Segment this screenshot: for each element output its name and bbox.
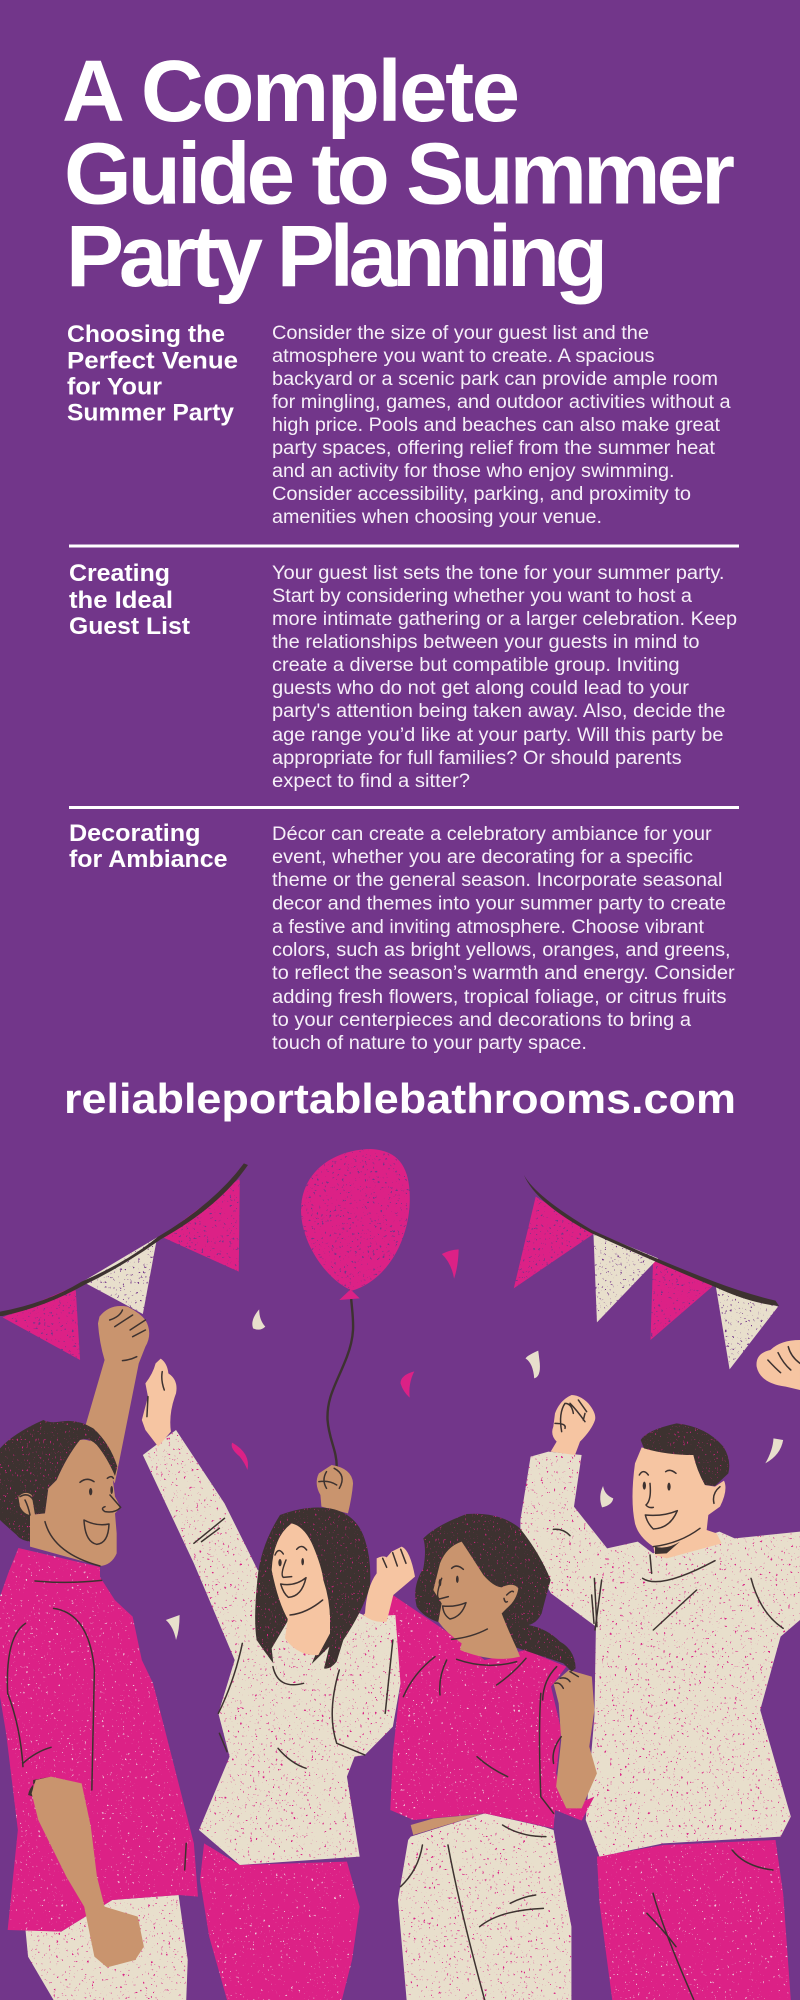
- man's head, arm fist and shirt creases: [551, 1395, 729, 1630]
- heading: choosing the venue: [67, 321, 238, 426]
- raised fist at right edge: [756, 1340, 800, 1390]
- man's head and hair: [0, 1420, 121, 1582]
- heading: choosing the venue: Summer Party: [67, 400, 235, 426]
- title: A Complete: [62, 43, 520, 140]
- body text: ambiance: Décor can create a celebratory ambiance for your: [272, 824, 712, 845]
- body text: guest list: more intimate gathering or a larger celebration. Keep: [272, 609, 737, 630]
- body text: venue: backyard or a scenic park can provide ample room: [272, 369, 718, 390]
- heading: choosing the venue: for Your: [67, 374, 162, 400]
- body text: guest list: Your guest list sets the tone for your summer party.: [272, 563, 724, 584]
- body text: guest list: age range you’d like at your party. Will this party be: [272, 725, 724, 746]
- body text: ambiance: theme or the general season. Incorporate seasonal: [272, 870, 722, 891]
- body text: venue: amenities when choosing your venue.: [272, 507, 602, 528]
- body text: ambiance: to reflect the season’s warmth and energy. Consider: [272, 963, 735, 984]
- body text: guest list: expect to find a sitter?: [272, 771, 470, 792]
- body text: guest list: appropriate for full families? Or should parents: [272, 748, 682, 769]
- body text: ambiance: colors, such as bright yellows, oranges, and greens,: [272, 940, 731, 961]
- title: [62, 43, 735, 305]
- woman's head and hair: [403, 1514, 578, 1700]
- heading: choosing the venue: Perfect Venue: [67, 348, 238, 374]
- body text: guest list: [272, 563, 737, 792]
- heading: ambiance: Decorating: [69, 820, 200, 847]
- title: Party Planning: [66, 208, 608, 305]
- person: woman in pink top: [317, 1465, 597, 2000]
- person: man on the left: [0, 1306, 198, 2000]
- body text: venue: party spaces, offering relief from the summer heat: [272, 438, 716, 459]
- heading: guest list: the Ideal: [69, 587, 173, 614]
- heading: choosing the venue: Choosing the: [67, 321, 225, 348]
- body text: venue: Consider accessibility, parking, and proximity to: [272, 484, 691, 505]
- person: woman in cream top: [142, 1359, 415, 2000]
- website url: reliableportablebathrooms.com: [64, 1075, 736, 1122]
- heading: guest list: [69, 560, 190, 640]
- body text: venue: for mingling, games, and outdoor activities without a: [272, 392, 731, 413]
- person: man on the right: [520, 1395, 800, 2000]
- body text: ambiance: event, whether you are decorating for a specific: [272, 847, 693, 868]
- body text: guest list: Start by considering whether you want to host a: [272, 586, 692, 607]
- body text: ambiance: adding fresh flowers, tropical foliage, or citrus fruits: [272, 987, 726, 1008]
- heading: ambiance: for Ambiance: [69, 846, 228, 873]
- body text: ambiance: touch of nature to your party space.: [272, 1033, 587, 1054]
- body text: ambiance: [272, 824, 735, 1054]
- body text: venue: high price. Pools and beaches can also make great: [272, 415, 721, 436]
- balloon: [301, 1149, 410, 1467]
- heading: ambiance: [69, 820, 228, 873]
- party illustration: [0, 1149, 800, 2000]
- body text: ambiance: to your centerpieces and decorations to bring a: [272, 1010, 691, 1031]
- bunting: left: [0, 1163, 248, 1360]
- heading: guest list: Guest List: [69, 613, 190, 640]
- bunting: right: [514, 1175, 779, 1369]
- fist holding the balloon string: [317, 1465, 353, 1513]
- body text: venue: and an activity for those who enjoy swimming.: [272, 461, 674, 482]
- body text: venue: atmosphere you want to create. A spacious: [272, 346, 655, 367]
- body text: guest list: create a diverse but compatible group. Inviting: [272, 655, 680, 676]
- body text: venue: Consider the size of your guest list and the: [272, 323, 649, 344]
- body text: guest list: the relationships between your guests in mind to: [272, 632, 700, 653]
- woman's head, hair and raised hand: [255, 1507, 415, 1669]
- body text: ambiance: a festive and inviting atmosphere. Choose vibrant: [272, 917, 705, 938]
- body text: guest list: guests who do not get along could lead to your: [272, 678, 690, 699]
- body text: guest list: party's attention being taken away. Also, decide the: [272, 701, 726, 722]
- body text: ambiance: decor and themes into your summer party to create: [272, 894, 726, 914]
- confetti: [166, 1249, 783, 1640]
- heading: guest list: Creating: [69, 560, 170, 587]
- body text: venue: [272, 323, 731, 528]
- title: Guide to Summer: [64, 126, 735, 222]
